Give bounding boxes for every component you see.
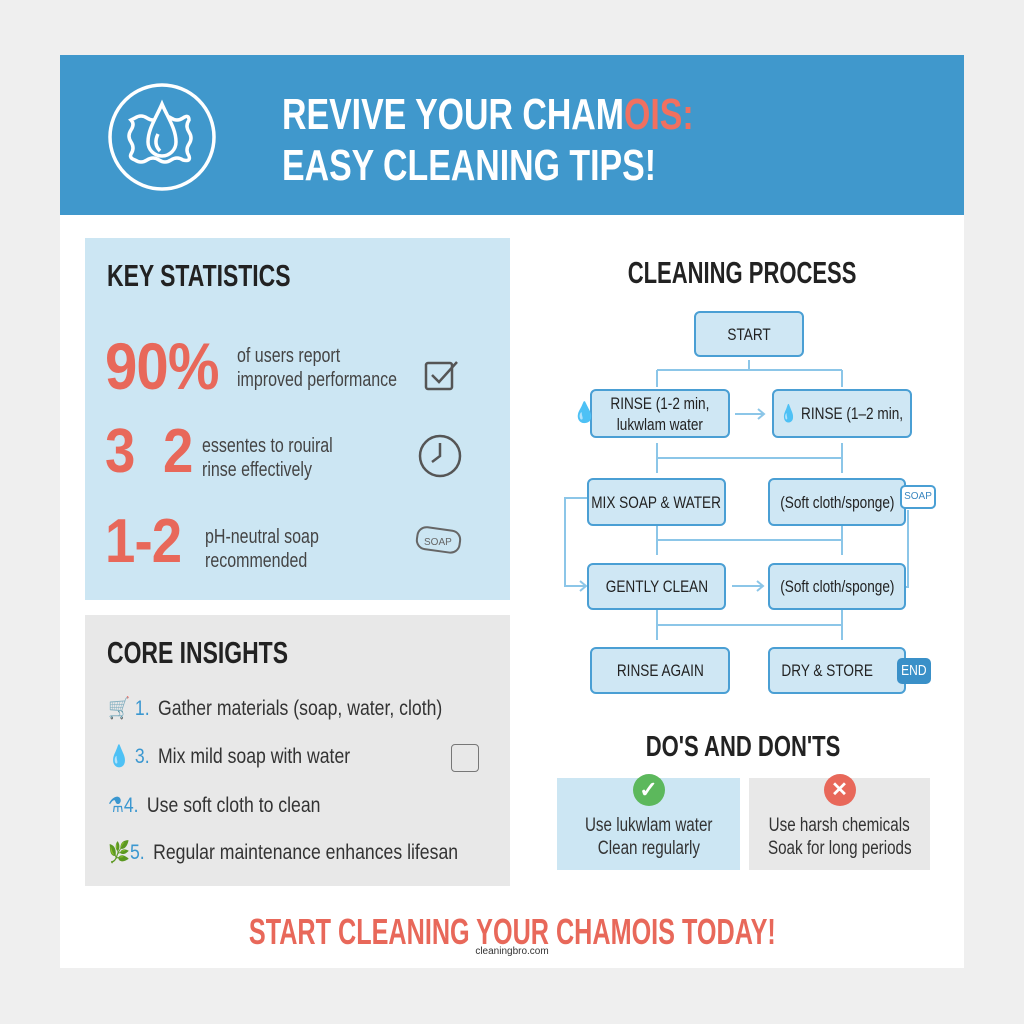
flow: dry & store [768, 647, 906, 694]
text: improved performance [237, 369, 397, 391]
heading: cleaning process: CLEANING PROCESS [628, 255, 856, 290]
icon: soap [416, 526, 462, 554]
panel: dos [557, 778, 740, 870]
icon: soap tag [900, 485, 936, 509]
icon: cross: ✕ [831, 779, 848, 801]
flow: mix soap: MIX SOAP & WATER [592, 492, 721, 512]
icon: cross [824, 774, 856, 806]
flow: rinse 2 [772, 389, 912, 438]
flow: start [694, 311, 804, 357]
icon: soap tag: SOAP [904, 491, 932, 502]
flow: start: START [727, 324, 771, 344]
heading: CORE INSIGHTS [107, 635, 288, 670]
stat 3 2: 3 2 [105, 417, 192, 486]
flow: soft cloth 1 [768, 478, 906, 526]
icon: check [632, 774, 664, 806]
text: pH-neutral soap [205, 526, 319, 548]
flow: rinse 1 [590, 389, 730, 438]
stat 1-2: 1-2 [105, 507, 181, 576]
icon: drop: 💧 [572, 402, 597, 424]
flow: rinse again: RINSE AGAIN [617, 661, 703, 680]
title [282, 90, 694, 190]
panel: key statistics [85, 238, 510, 600]
flow: gently clean [587, 563, 726, 610]
watermark: cleaningbro.com [475, 946, 549, 957]
insight 3: 💧 3. Mix mild soap with water [108, 745, 350, 768]
flow: dry & store: DRY & STORE [781, 661, 873, 680]
flow: rinse again [590, 647, 730, 694]
panel: core insights [85, 615, 510, 886]
card [60, 55, 964, 968]
flow: soft cloth 1: (Soft cloth/sponge) [780, 492, 894, 512]
heading: do's and don'ts: DO'S AND DON'TS [646, 731, 841, 763]
text: rinse effectively [202, 459, 312, 481]
end tag: END [901, 662, 927, 679]
insight 4: ⚗4. Use soft cloth to clean [108, 794, 320, 817]
title: REVIVE YOUR CHAMOIS: [282, 90, 694, 139]
heading: KEY STATISTICS [107, 258, 291, 293]
flowchart connectors [564, 360, 909, 640]
icon: chamois drop [108, 83, 216, 191]
text: essentes to rouiral [202, 435, 333, 457]
flow: rinse 2: 💧 RINSE (1–2 min, [781, 404, 903, 423]
panel: dos: Use lukwlam water [585, 815, 712, 836]
insight 5: 🌿5. Regular maintenance enhances lifesan [108, 841, 458, 864]
panel: donts [749, 778, 930, 870]
panel: dos: Clean regularly [597, 838, 700, 859]
panel: donts: Use harsh chemicals [769, 815, 910, 836]
flow: rinse 1: RINSE (1-2 min, [610, 394, 710, 412]
end tag [897, 658, 931, 684]
text: of users report [237, 345, 340, 367]
icon: small soap [451, 744, 479, 772]
panel: donts: Soak for long periods [768, 838, 911, 859]
title: EASY CLEANING TIPS! [282, 141, 656, 190]
flow: soft cloth 2: (Soft cloth/sponge) [780, 577, 894, 596]
icon: clock [418, 434, 462, 478]
flow: rinse 1: lukwlam water [617, 414, 703, 434]
footer call to action: START CLEANING YOUR CHAMOIS TODAY! [249, 911, 775, 952]
text: recommended [205, 550, 307, 572]
flow: gently clean: GENTLY CLEAN [605, 577, 708, 596]
icon: checkbox [424, 361, 458, 390]
icon: soap: SOAP [424, 537, 452, 548]
header banner [60, 55, 964, 215]
flow: soft cloth 2 [768, 563, 906, 610]
insight 1: 🛒 1. Gather materials (soap, water, cloth) [108, 697, 442, 720]
icon: check: ✓ [639, 777, 658, 802]
stat 90%: 90% [105, 329, 219, 403]
flow: mix soap [587, 478, 726, 526]
